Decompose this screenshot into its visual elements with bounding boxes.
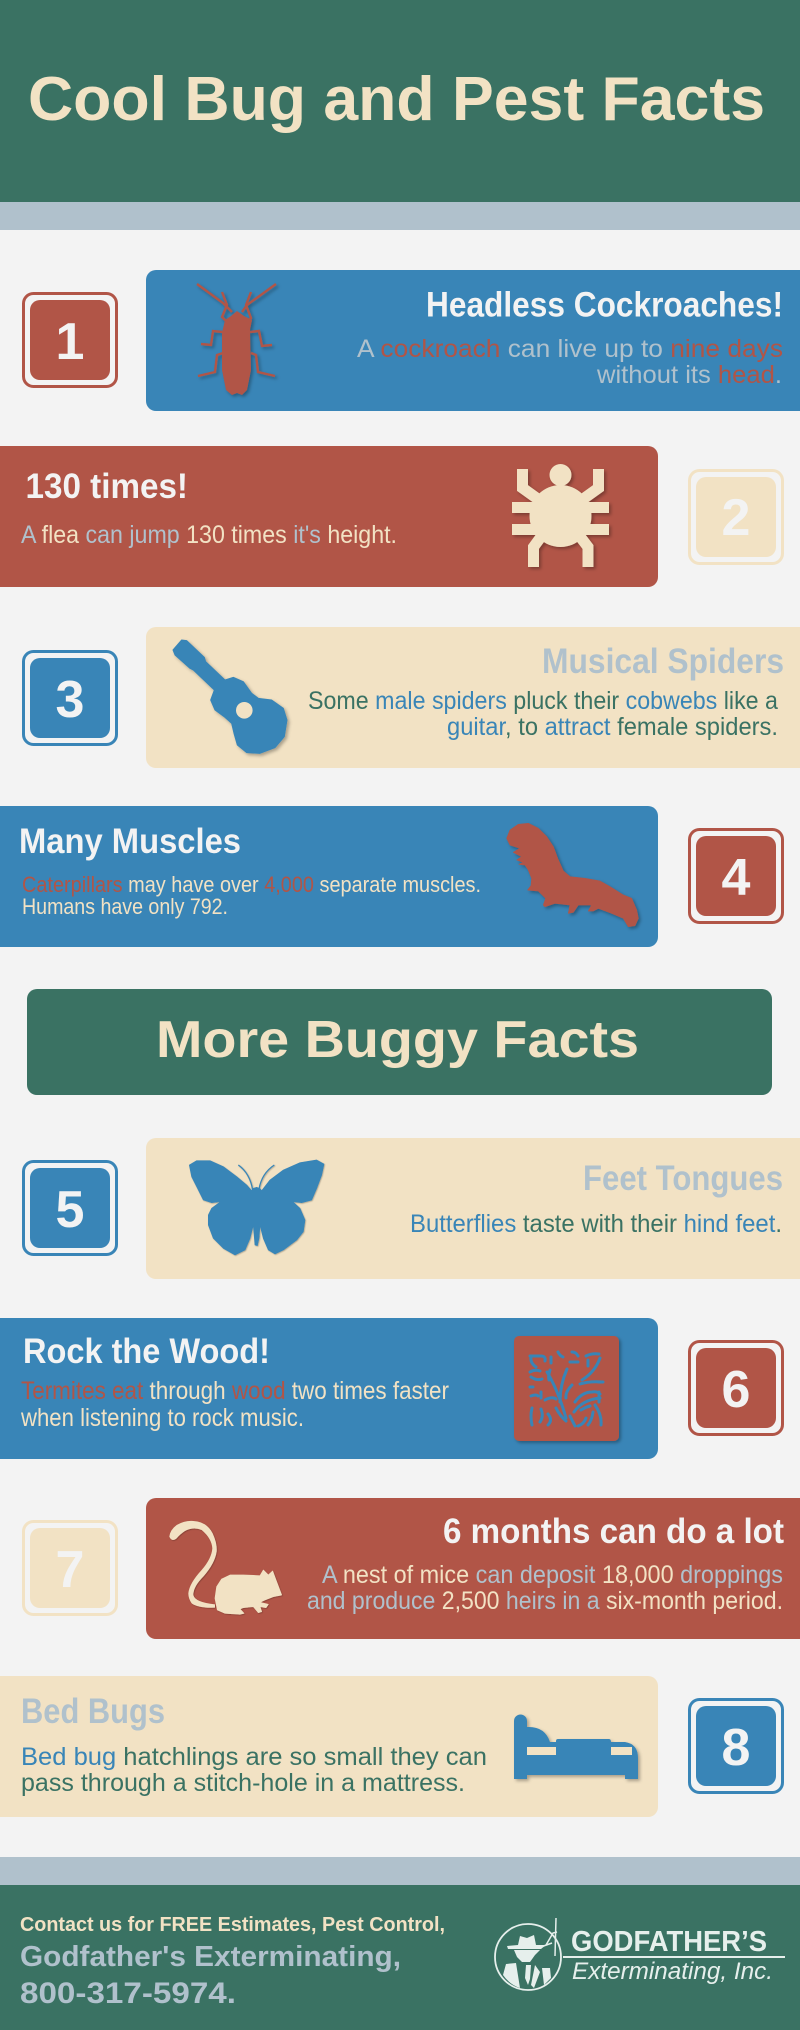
heading: 130 times!: [26, 467, 188, 506]
number badge 5: 5: [56, 1181, 84, 1239]
icon: flea: [512, 464, 609, 567]
panel: many muscles: [0, 806, 658, 947]
contact text: Contact us for FREE Estimates, Pest Control,: [20, 1914, 445, 1936]
icon: cockroach: [197, 284, 276, 395]
body text: [22, 872, 481, 919]
number badge 1: [24, 294, 116, 386]
panel: 130 times: [0, 446, 658, 587]
number badge 3: [24, 652, 116, 744]
section banner: more buggy facts: More Buggy Facts: [156, 1011, 639, 1069]
panel: bed bugs: [0, 1676, 658, 1817]
icon: termite-eaten wood block: [514, 1336, 619, 1441]
logo: GODFATHER’S: [571, 1926, 767, 1958]
body text: pass through a stitch-hole in a mattress.: [21, 1769, 465, 1797]
body text: Some male spiders pluck their cobwebs like a: [308, 687, 778, 715]
number badge 1: 1: [56, 313, 84, 371]
number badge 7: 7: [56, 1541, 84, 1599]
body text: [308, 687, 778, 741]
contact text: [20, 1914, 445, 2010]
body text: [20, 1377, 449, 1432]
body text: Humans have only 792.: [22, 894, 228, 919]
body text: [307, 1561, 783, 1615]
number badge 7: [24, 1522, 116, 1614]
number badge 6: 6: [722, 1361, 750, 1419]
heading: Many Muscles: [19, 822, 241, 861]
heading: Bed Bugs: [21, 1692, 165, 1731]
body text: Termites eat through wood two times faster: [21, 1377, 449, 1405]
body text: Caterpillars may have over 4,000 separate muscles.: [22, 872, 481, 897]
body text: and produce 2,500 heirs in a six-month period.: [307, 1587, 783, 1615]
icon: mouse: [169, 1521, 282, 1614]
body text: [357, 335, 783, 389]
contact text: 800-317-5974.: [20, 1977, 236, 2010]
body text: A flea can jump 130 times it's height.: [21, 521, 397, 549]
panel: feet tongues: [146, 1138, 800, 1279]
body text: guitar, to attract female spiders.: [447, 713, 778, 741]
number badge 2: [690, 470, 782, 564]
panel: headless cockroaches: [146, 270, 800, 411]
body text: [21, 1743, 487, 1797]
number badge 6: [690, 1342, 782, 1434]
icon: bed: [514, 1714, 638, 1779]
panel: musical spiders: [146, 627, 800, 768]
logo: Exterminating, Inc.: [572, 1958, 773, 1985]
body text: when listening to rock music.: [20, 1404, 304, 1432]
panel: rock the wood: [0, 1318, 658, 1459]
section banner: more buggy facts: [27, 989, 772, 1095]
icon: butterfly: [189, 1160, 324, 1255]
icon: caterpillar: [507, 823, 638, 927]
body text: Bed bug hatchlings are so small they can: [21, 1743, 487, 1771]
body text: Butterflies taste with their hind feet.: [410, 1210, 782, 1238]
body text: without its head.: [596, 361, 782, 389]
icon: guitar: [173, 640, 287, 753]
heading: 6 months can do a lot: [443, 1512, 784, 1551]
number badge 5: [24, 1162, 116, 1254]
logo: [495, 1918, 785, 1990]
body text: A nest of mice can deposit 18,000 droppings: [322, 1561, 783, 1589]
number badge 4: 4: [722, 849, 751, 907]
contact text: Godfather's Exterminating,: [20, 1941, 401, 1973]
title: Cool Bug and Pest Facts: [28, 65, 765, 134]
number badge 4: [690, 830, 782, 922]
number badge 8: 8: [722, 1719, 750, 1777]
header banner: [0, 0, 800, 230]
body text: A cockroach can live up to nine days: [357, 335, 783, 363]
heading: Rock the Wood!: [23, 1332, 270, 1371]
panel: 6 months: [146, 1498, 800, 1639]
footer: [0, 1857, 800, 2030]
number badge 2: 2: [722, 489, 750, 547]
number badge 8: [690, 1700, 782, 1792]
number badge 3: 3: [56, 671, 84, 729]
